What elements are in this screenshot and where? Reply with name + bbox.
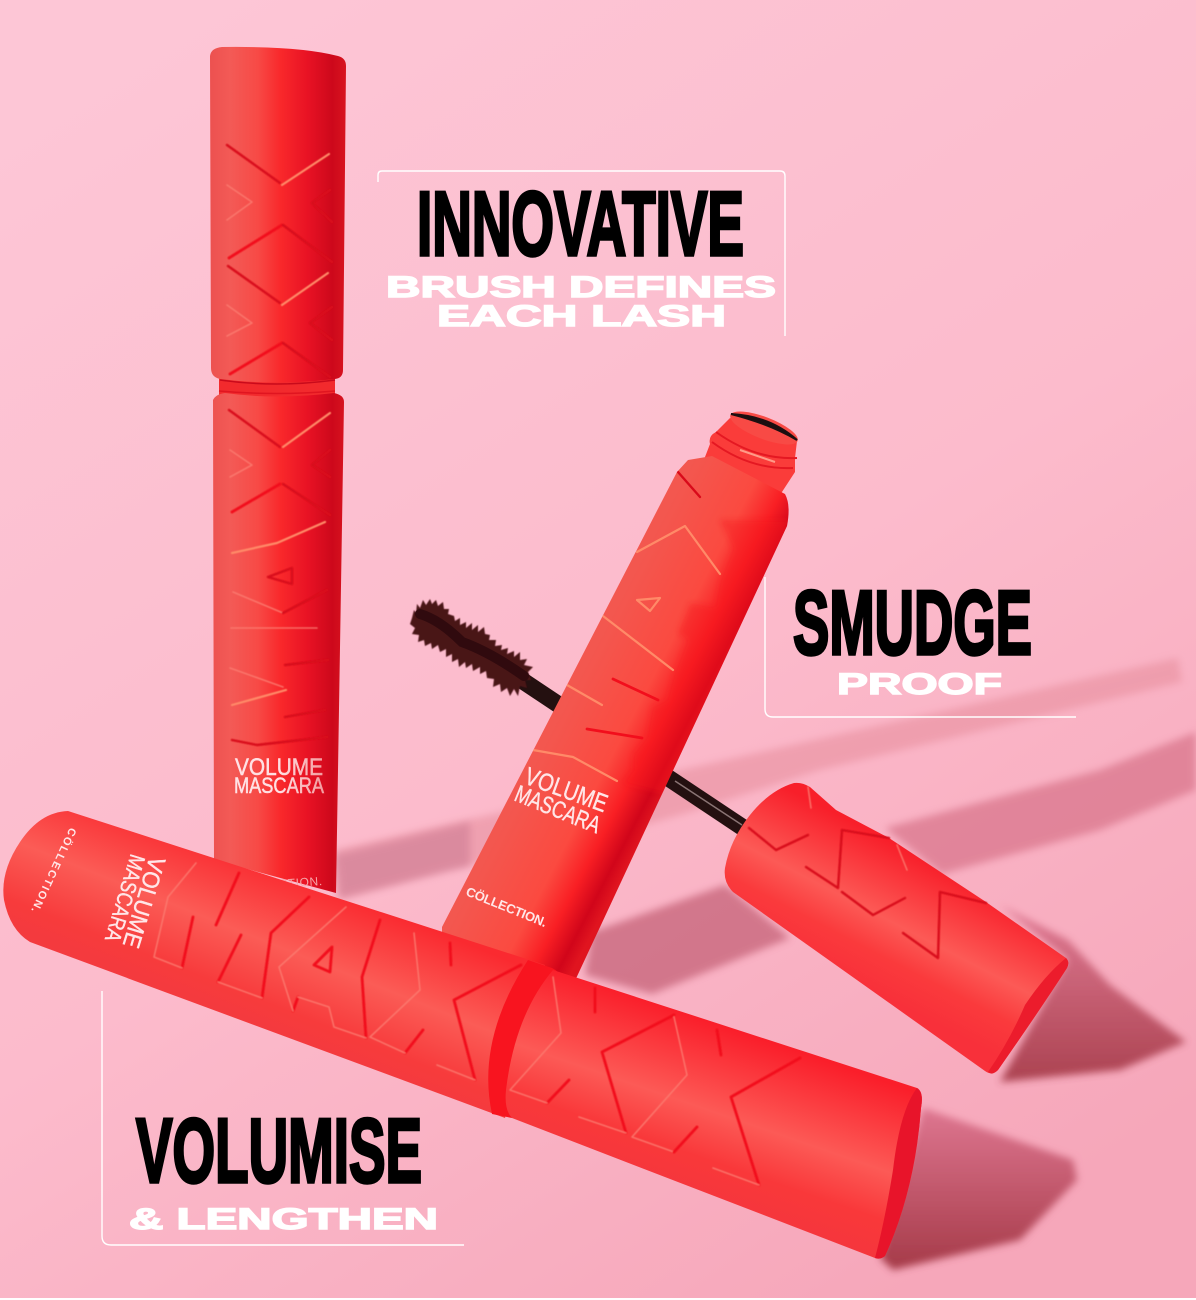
product label (234, 754, 324, 798)
subheading: PROOF (837, 668, 1002, 701)
embossed logo: XX (749, 787, 986, 958)
neck and rim (700, 405, 802, 495)
subheading: & LENGTHEN (129, 1203, 438, 1236)
product label: MASCARA (234, 773, 324, 798)
mascara: open tube (442, 405, 802, 985)
brush and wand (410, 599, 745, 829)
mascara: lying closed tube (3, 811, 922, 1259)
callout: volumise and lengthen (102, 991, 464, 1245)
embossed logo: XX on cap (227, 145, 332, 377)
subheading: EACH LASH (437, 300, 726, 333)
product label (511, 762, 611, 839)
heading: INNOVATIVE (417, 174, 744, 275)
subheading: BRUSH DEFINES (386, 271, 776, 304)
heading: VOLUMISE (136, 1101, 422, 1202)
subheading (386, 271, 776, 333)
callout: smudge proof (765, 573, 1076, 717)
cast shadows (335, 658, 1196, 1270)
product label: VOLUME (235, 754, 323, 781)
brand: CÖLLECTION. (464, 884, 549, 930)
embossed logo: MAX on body (229, 410, 330, 745)
mascara: upright closed tube: COLLECTION. (236, 874, 323, 894)
heading: SMUDGE (793, 573, 1032, 674)
mascara: loose cap (725, 783, 1068, 1074)
product label: MASCARA (511, 781, 604, 839)
embossed logo: MAX (154, 863, 521, 1080)
brand: CÖLLECTION. (28, 826, 79, 915)
product label: MASCARA (100, 852, 150, 945)
product label: VOLUME (521, 762, 611, 818)
embossed logo: XX (510, 977, 800, 1185)
mascara: upright closed tube (210, 47, 346, 894)
embossed logo (533, 472, 790, 800)
callout: innovative (378, 171, 785, 336)
product label: VOLUME (117, 853, 170, 951)
